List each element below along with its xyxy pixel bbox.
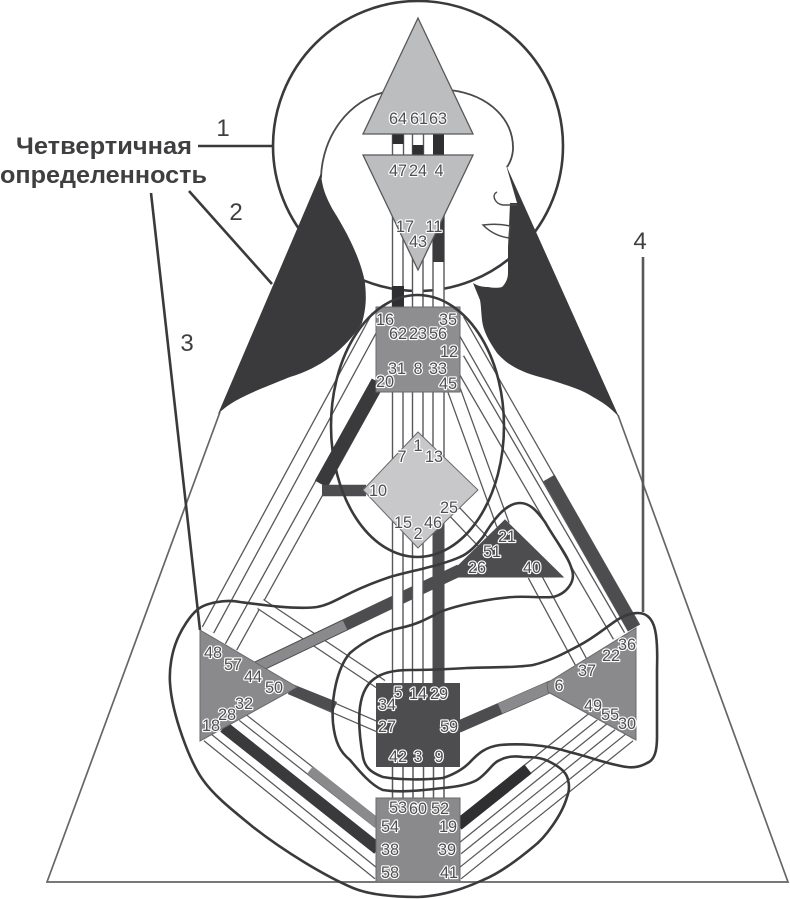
gate numbers: 10 [369,482,387,500]
sacral center [376,683,460,767]
heading [0,133,207,189]
gate numbers: 31 [388,360,406,378]
channel 12-22 [458,359,619,636]
leader line 4 [642,257,644,612]
halo circle [273,1,563,291]
gate numbers: 51 [483,543,501,561]
gate numbers: 8 [413,360,423,378]
gate numbers: 1 [413,437,423,455]
label 2: 2 [229,199,243,226]
gate numbers: 30 [618,715,636,733]
gate numbers: 20 [376,373,394,391]
channel 40-37 [534,575,581,662]
leader line 1 [198,145,273,147]
channel 10-34 [260,604,382,685]
gate numbers: 26 [468,559,486,577]
label 3: 3 [180,330,194,357]
spleen center [200,630,297,741]
channel 35-36 [458,320,634,628]
gate numbers: 39 [438,841,456,859]
gate numbers: 57 [224,656,242,674]
head outline [321,90,513,178]
gate numbers: 9 [434,748,444,766]
gate numbers: 21 [498,528,516,546]
gate numbers: 35 [439,311,457,329]
channel 49-19 [458,716,594,825]
gate numbers: 13 [425,448,443,466]
gate numbers: 38 [381,841,399,859]
channel 50-27 [290,689,378,727]
gate numbers: 22 [602,647,620,665]
gate numbers: 42 [389,748,407,766]
gate numbers: 59 [440,718,458,736]
gate numbers: 28 [218,706,236,724]
gate numbers: 17 [396,218,414,236]
gate numbers: 60 [409,800,427,818]
ajna center [363,155,473,270]
gate numbers: 44 [244,668,262,686]
gate numbers: 5 [393,684,403,702]
gate numbers: 45 [439,375,457,393]
gate numbers: 27 [378,718,396,736]
channel 26-44 [257,570,460,667]
gate numbers: 54 [381,818,399,836]
heading: определенность [0,162,207,189]
channel 48-16 [208,316,378,630]
gate numbers: 18 [202,717,220,735]
gate numbers: 62 [389,325,407,343]
gate numbers: 46 [424,514,442,532]
channel 10 gate [322,485,366,496]
label 4: 4 [633,228,647,255]
gate numbers: 50 [265,679,283,697]
gate numbers: 6 [554,677,564,695]
leader line 2 [189,191,272,284]
gate numbers: 4 [434,162,444,180]
channel 59-6 [458,686,552,727]
gate numbers: 49 [584,697,602,715]
gate numbers: 55 [601,706,619,724]
gate numbers: 40 [523,559,541,577]
root center [376,798,460,882]
gate numbers: 14 [409,685,427,703]
gate numbers: 19 [439,818,457,836]
hair right [473,165,619,417]
vertical channels ajna to throat [392,210,444,308]
channel 28-38 [224,727,378,849]
channel 32-54 [242,717,378,824]
gate numbers: 11 [426,218,442,236]
vertical channels G to sacral [392,510,444,686]
gate numbers: 37 [578,662,596,680]
gate numbers: 53 [389,799,407,817]
channel 57-20 [231,382,378,647]
heart center [443,520,563,584]
gate numbers: 16 [376,311,394,329]
body outline [47,412,788,882]
channel 25-51 [452,509,486,545]
gate numbers: 47 [389,162,407,180]
label 1: 1 [216,115,230,142]
hair left [218,173,366,414]
definition loop 2 [331,295,504,557]
vertical channels throat to G [392,390,444,490]
vertical channels head to ajna [392,133,444,156]
vertical channels sacral to root [392,765,444,800]
leader line 3 [151,193,200,630]
gate numbers [202,110,636,882]
gate numbers: 63 [429,110,447,128]
gate numbers: 2 [413,525,423,543]
gate numbers: 32 [235,695,253,713]
solar plexus center [547,628,636,740]
nose [494,192,517,205]
gate numbers: 29 [430,685,448,703]
gate numbers: 41 [440,864,458,882]
gate numbers: 33 [429,360,447,378]
G center [363,432,478,548]
mouth [483,224,510,238]
channel 39-55 [458,726,612,850]
gate numbers: 64 [389,110,407,128]
gate numbers: 3 [413,748,423,766]
gate numbers: 61 [410,110,428,128]
gate numbers: 36 [618,636,636,654]
definition loop 3 [170,503,573,897]
gate numbers: 52 [431,800,449,818]
channel 45-21 [454,390,503,525]
gate numbers: 12 [440,343,458,361]
gate numbers: 58 [381,864,399,882]
gate numbers: 48 [204,644,222,662]
gate numbers: 23 [409,325,427,343]
gate numbers: 25 [440,499,458,517]
definition loop 4 [359,613,657,779]
gate numbers: 56 [429,325,447,343]
gate numbers: 43 [409,233,427,251]
gate numbers: 24 [409,162,427,180]
channel 18-58 [207,737,378,875]
throat center [376,307,460,392]
head center [363,18,473,134]
heading: Четвертичная [16,133,192,160]
gate numbers: 15 [394,514,412,532]
gate numbers: 7 [397,448,407,466]
channel 41-30 [458,737,630,875]
gate numbers: 34 [378,696,396,714]
